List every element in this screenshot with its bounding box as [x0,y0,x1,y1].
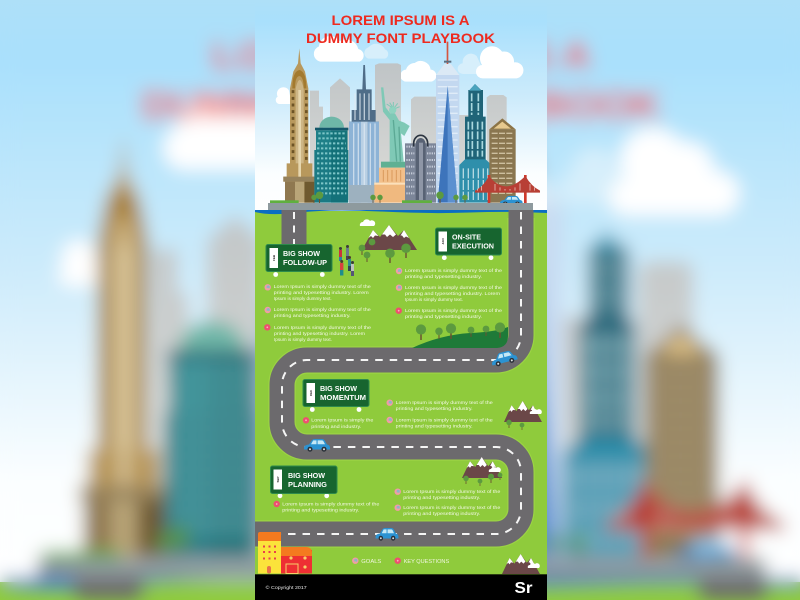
legend: goals and key questions: GOALS [361,559,382,565]
road stubs under bridge [282,210,534,218]
icon: art deco tan skyscraper [283,48,315,203]
icon: bottom mountains [502,554,540,574]
text block: follow-up bullets [264,284,371,343]
text block: planning bullets: Lorem Ipsum is simply dummy text of the [282,502,380,508]
text block: on-site bullets: printing and typesetting industry. [405,314,482,320]
text block: follow-up bullets: Ipsum is simply dummy text. [274,337,332,343]
text block: on-site bullets: Lorem Ipsum is simply dummy text of the [405,285,502,291]
sign: on-site execution: JAN [441,238,445,245]
text block: on-site bullets: printing and typesetting industry. Lorem [405,291,500,297]
title: LOREM IPSUM IS A [332,12,470,28]
icon: brown office tower [489,118,516,203]
sign: big show planning: BIG SHOW [288,471,325,480]
footer bar: © Copyright 2017 [266,584,307,591]
icon: statue of liberty [374,87,410,203]
text block: planning bullets: Lorem Ipsum is simply dummy text of the [403,489,501,495]
icon: blue car upper road [490,349,518,368]
sign: big show planning: PLANNING [288,480,327,489]
icon: grey arched building [405,135,436,203]
sign: big show momentum: DEC [309,389,313,396]
icon: one world trade spire [436,42,459,203]
text block: on-site bullets [396,268,502,320]
sign: big show follow-up: BIG SHOW [283,249,320,258]
legend: goals and key questions [352,558,449,565]
sign: big show follow-up [266,244,332,277]
footer bar [255,574,547,600]
text block: follow-up bullets: Lorem Ipsum is simply dummy text of the [274,307,371,313]
sign: big show momentum [303,380,369,412]
sign: on-site execution [436,228,502,260]
text block: follow-up bullets: Lorem Ipsum is simply dummy text of the [274,325,371,331]
mountains with trees: top [359,219,417,263]
icon: blue tower with spire [349,65,379,203]
icon: red suspension bridge [475,175,540,203]
text block: momentum bullets [303,400,493,430]
sign: big show momentum: MOMENTUM [320,393,366,402]
icon: blue car middle road [304,439,330,452]
text block: momentum bullets: printing and typesetting industry. [396,424,473,430]
sign: big show follow-up: FEB [272,254,276,261]
sign: on-site execution: EXECUTION [452,242,494,250]
text block: on-site bullets: Ipsum is simply dummy text. [405,297,463,303]
background: grass strip [0,582,800,600]
icon: blue car lower road [376,528,398,541]
water strip [255,210,547,214]
text block: follow-up bullets: Lorem Ipsum is simply dummy text of the [274,284,371,290]
text block: planning bullets [274,488,501,517]
dark green hill with trees [412,322,508,348]
icon: right mountains [504,401,542,430]
sign: big show momentum: BIG SHOW [320,384,357,393]
grass field [255,218,547,575]
icon: city trees [311,192,468,203]
icon: small car on bridge [500,196,523,205]
text block: momentum bullets: Lorem Ipsum is simply dummy text of the [396,400,493,406]
text block: momentum bullets: printing and typesetting industry. [396,406,473,412]
text block: planning bullets: printing and typesetting industry. [403,511,480,517]
sign: on-site execution: ON-SITE [452,232,481,242]
text block: planning bullets: printing and typesetting industry. [403,495,480,501]
icon: yellow and red buildings [258,532,312,574]
text block: momentum bullets: printing and industry. [311,424,361,430]
text block: follow-up bullets: printing and typesetting industry. Lorem [274,331,365,337]
text block: planning bullets: printing and typesetting industry. [282,508,359,514]
text block: on-site bullets: Lorem Ipsum is simply dummy text of the [405,308,502,314]
bridge roadway band [268,203,533,210]
text block: planning bullets: Lorem Ipsum is simply dummy text of the [403,505,501,511]
icon: teal stepped tower [459,84,492,203]
text block: on-site bullets: Lorem Ipsum is simply dummy text of the [405,268,502,274]
road: winding path [255,212,521,534]
icon: teal domed building [314,117,348,203]
text block: on-site bullets: printing and typesetting industry. [405,274,482,280]
grass field: top strip [255,211,547,218]
sign: big show planning: SEP [276,476,280,483]
text block: momentum bullets: Lorem Ipsum is simply the [311,418,374,424]
icon: mid mountains [462,457,502,486]
sign: big show planning [270,466,337,498]
title [306,12,495,46]
legend: goals and key questions: KEY QUESTIONS [404,559,449,565]
title: DUMMY FONT PLAYBOOK [306,30,495,46]
footer bar: Sr [514,580,532,597]
people group [339,245,354,276]
sign: big show follow-up: FOLLOW-UP [283,258,327,267]
text block: follow-up bullets: Ipsum is simply dummy text. [274,296,332,302]
text block: follow-up bullets: printing and typesetting industry. Lorem [274,290,369,296]
text block: momentum bullets: Lorem Ipsum is simply dummy text of the [396,418,493,424]
panel: poster [255,0,547,600]
panel: poster header with city skyline [255,0,547,218]
text block: follow-up bullets: printing and typesetting industry. [274,313,351,319]
